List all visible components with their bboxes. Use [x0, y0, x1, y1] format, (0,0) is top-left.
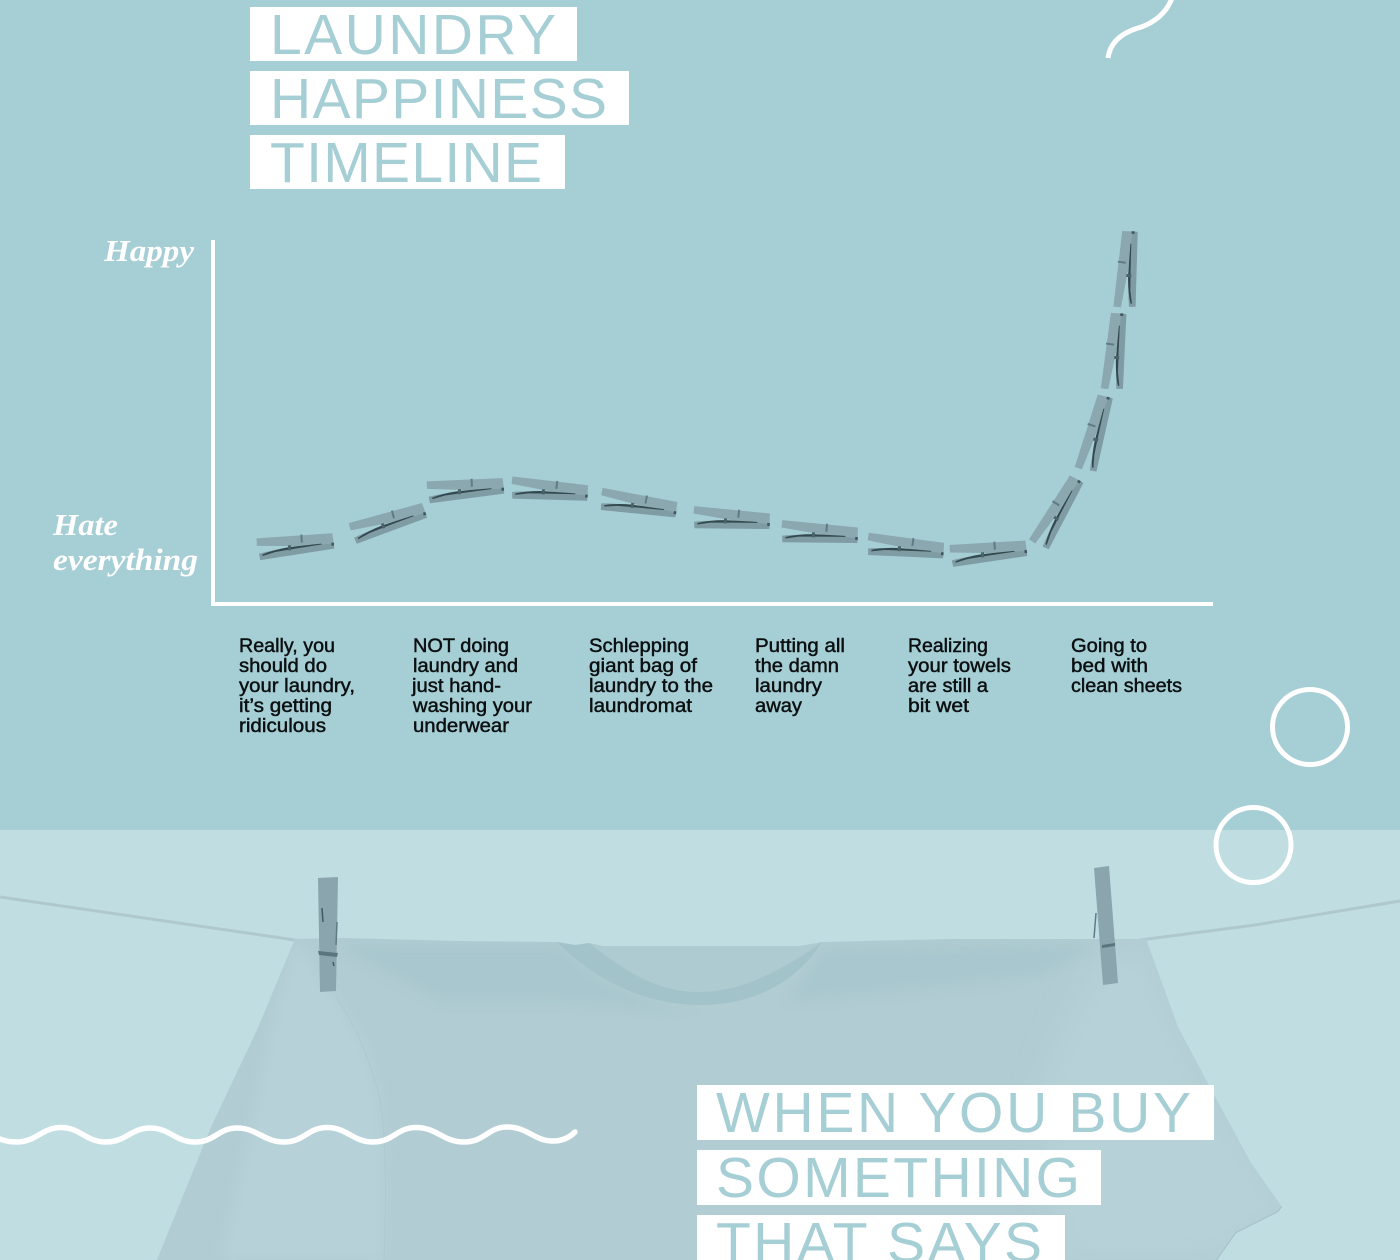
y axis label: hate everything: Hate	[52, 507, 118, 542]
x label 4: Putting all	[755, 636, 845, 657]
x label 3: Schlepping	[589, 636, 689, 657]
x label 5: are still a	[908, 676, 988, 697]
heading: when you buy something that says	[697, 1081, 1214, 1260]
clothesline rope left	[0, 897, 295, 940]
yoke shadow left	[379, 953, 608, 996]
heading: when you buy something that says: SOMETHING	[716, 1146, 1080, 1210]
neck opening	[589, 942, 822, 992]
clothespin point 5	[598, 487, 678, 524]
x label 1: ridiculous	[239, 716, 326, 737]
x label 5: bit wet	[908, 696, 970, 717]
x label 2: just hand-	[411, 676, 501, 697]
decorative circle lower	[1216, 808, 1291, 882]
x label 6: bed with	[1071, 656, 1148, 677]
x label 3: laundry to the	[589, 676, 713, 697]
right sleeve highlight	[1040, 945, 1290, 1260]
x label 4: away	[755, 696, 803, 717]
x label 5: Realizing	[908, 636, 988, 657]
x label 1: it’s getting	[239, 696, 332, 717]
x label 1: your laundry,	[239, 676, 355, 697]
decorative wave	[0, 1127, 575, 1142]
x label 3	[589, 636, 713, 717]
x label 1: Really, you	[239, 636, 335, 657]
clothespin point 13	[1112, 230, 1145, 309]
decorative squiggle top right	[1108, 0, 1172, 58]
sleeve fold left	[336, 997, 386, 1260]
clothespin point 3	[427, 478, 504, 503]
top panel background	[0, 0, 1400, 830]
x label 6	[1071, 636, 1182, 697]
clothespin point 11	[1074, 394, 1119, 474]
y axis label: happy: Happy	[103, 233, 194, 268]
left sleeve highlight	[220, 939, 386, 1260]
bottom panel background	[0, 830, 1400, 1260]
x label 2: laundry and	[413, 656, 518, 677]
yoke shadow right	[810, 954, 1046, 990]
y axis label: hate everything: everything	[53, 542, 198, 577]
clothespin point 10	[1028, 474, 1089, 551]
heading: when you buy something that says: WHEN YOU BUY	[716, 1081, 1191, 1145]
clothespin point 1	[256, 533, 335, 560]
x label 4	[755, 636, 845, 717]
y axis label: hate everything	[52, 507, 198, 577]
collar band	[557, 942, 822, 1005]
title: laundry happiness timeline: HAPPINESS	[270, 67, 607, 131]
clothespin point 7	[780, 519, 859, 550]
t-shirt photo	[150, 930, 1290, 1260]
x label 2: underwear	[413, 716, 510, 737]
shirt clothespin right	[1094, 866, 1118, 985]
clothespin point 2	[348, 502, 429, 544]
x label 5	[908, 636, 1011, 717]
x label 2	[411, 636, 533, 737]
x label 3: giant bag of	[589, 656, 698, 677]
clothesline rope right	[1140, 901, 1400, 940]
x label 6: Going to	[1071, 636, 1147, 657]
x label 4: the damn	[755, 656, 839, 677]
x label 2: NOT doing	[413, 636, 509, 657]
clothespin point 8	[866, 532, 945, 565]
decorative circle upper	[1272, 690, 1348, 764]
chart axes	[213, 240, 1213, 604]
clothespin point 9	[949, 540, 1028, 567]
shirt clothespin left	[318, 877, 338, 992]
x label 1: should do	[239, 656, 327, 677]
clothespin point 12	[1100, 312, 1133, 391]
title: laundry happiness timeline: TIMELINE	[270, 131, 542, 195]
clothespin line chart	[256, 230, 1145, 567]
x label 1	[239, 636, 355, 737]
title: laundry happiness timeline: LAUNDRY	[270, 3, 556, 67]
x label 2: washing your	[412, 696, 533, 717]
clothespin point 4	[510, 475, 589, 508]
x label 4: laundry	[755, 676, 823, 697]
x label 6: clean sheets	[1071, 676, 1182, 697]
clothespin point 6	[692, 505, 771, 536]
hem right	[1217, 1207, 1282, 1260]
x label 5: your towels	[908, 656, 1011, 677]
x label 3: laundromat	[589, 696, 693, 717]
title: laundry happiness timeline	[250, 3, 629, 195]
